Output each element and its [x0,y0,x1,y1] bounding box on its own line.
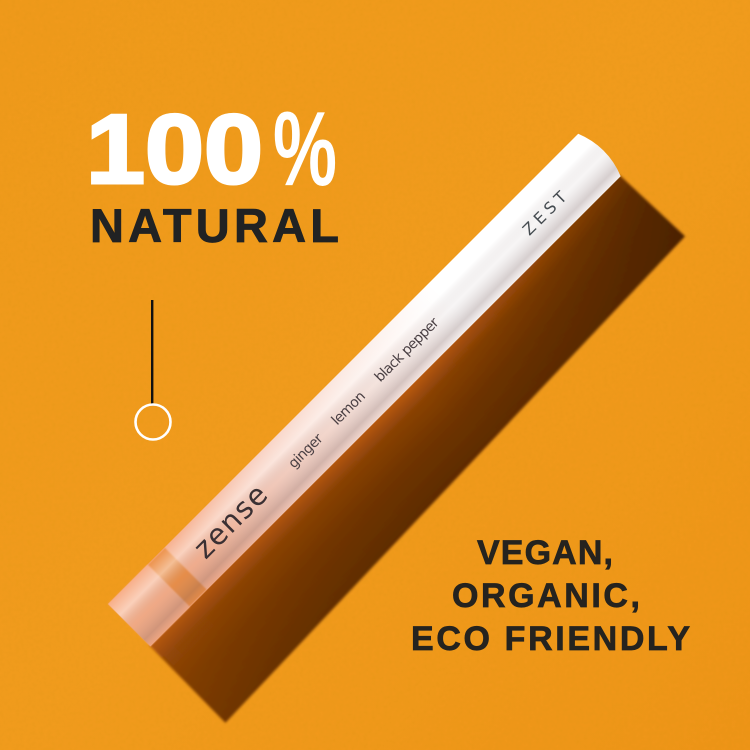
tube base [108,130,625,646]
tube body [108,130,625,646]
heading percent sign: % [273,90,337,208]
cast shadow [148,173,698,723]
claim: organic: ORGANIC, [452,577,640,615]
callout line [151,300,153,405]
ingredient: black pepper: black pepper [372,315,443,386]
callout circle [136,404,170,440]
product group: tube with cast shadow [107,130,701,723]
heading: 100% NATURAL [86,90,339,252]
claims text [411,534,690,658]
heading word: NATURAL: NATURAL [90,199,339,252]
orange inner band [148,548,207,606]
tube cylindrical shading [108,130,625,646]
ingredient: ginger: ginger [285,431,327,472]
ingredient: lemon: lemon [329,388,369,429]
translucent cap [108,564,190,646]
variant name: ZEST: ZEST [519,187,571,239]
brand name: zense: zense [186,477,274,565]
claim: vegan: VEGAN, [477,534,613,572]
heading number: 100: 100 [86,94,263,204]
claim: eco friendly: ECO FRIENDLY [411,620,690,658]
